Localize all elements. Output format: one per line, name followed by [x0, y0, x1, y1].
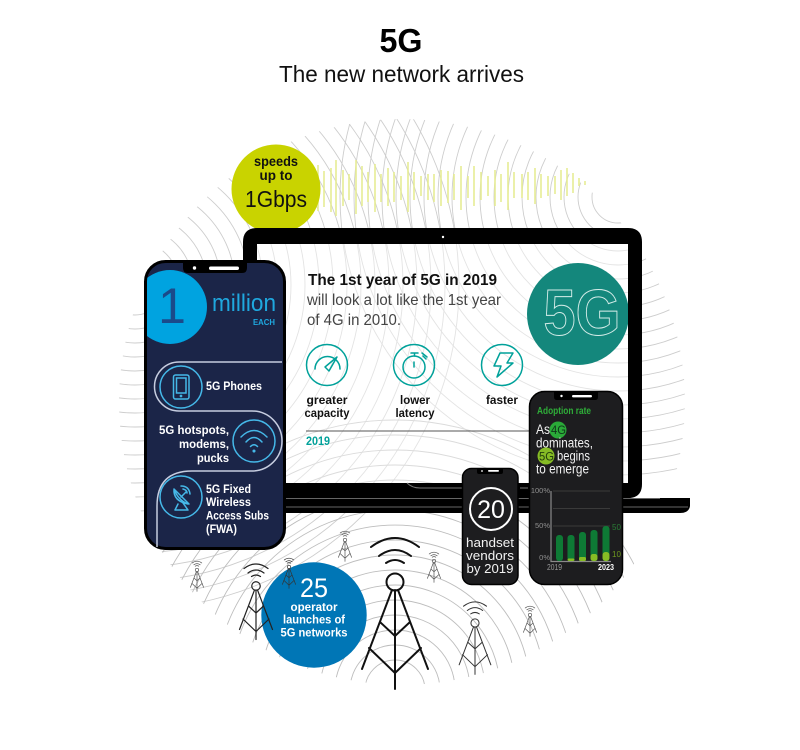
tower: small behind — [338, 531, 352, 561]
icon: stopwatch — [394, 344, 434, 386]
big 1 circle — [147, 270, 207, 344]
adoption text: 4G — [551, 423, 566, 437]
feature labels: greater — [306, 395, 348, 407]
operator launches bubble: 5G networks — [280, 628, 348, 640]
screen heading: The 1st year of 5G in 2019 — [308, 272, 497, 289]
speed bubble: speeds — [254, 154, 298, 169]
tower: right — [459, 602, 491, 674]
vendors text: handset — [466, 535, 514, 550]
panel: middle phone — [462, 468, 518, 584]
laptop screen lightening — [257, 244, 628, 483]
feature labels — [304, 395, 519, 420]
adoption heading: Adoption rate — [537, 405, 591, 417]
vendors text: vendors — [466, 548, 515, 563]
adoption bar chart: 50% — [535, 521, 550, 530]
feature labels: faster — [486, 395, 519, 407]
label: fixed wireless — [206, 484, 269, 536]
label: hotspots — [159, 425, 229, 465]
icon: wifi — [233, 420, 275, 462]
adoption text: to emerge — [536, 462, 589, 476]
speed bubble — [232, 144, 320, 234]
label: 5G Phones: 5G Phones — [206, 381, 262, 393]
notch — [477, 469, 503, 474]
each: EACH — [253, 317, 275, 327]
speaker — [560, 395, 592, 397]
tower: small far left — [190, 561, 204, 591]
screen body text: will look a lot like the 1st year — [306, 292, 502, 309]
number 1: 1 — [158, 278, 186, 334]
laptop base — [285, 498, 690, 513]
vendors text: by 2019 — [466, 561, 514, 576]
label: fixed wireless: Wireless — [206, 497, 251, 509]
soundwave speed bars — [318, 160, 585, 216]
label: fixed wireless: Access Subs — [206, 510, 269, 522]
icon: lightning — [482, 344, 522, 386]
notch — [554, 392, 598, 400]
speed bubble: 1Gbps — [245, 186, 307, 212]
tower: main — [362, 538, 428, 689]
adoption text — [536, 422, 593, 476]
laptop hinge notch — [407, 483, 528, 488]
5G badge: 5G — [544, 276, 620, 349]
vendors text — [466, 535, 515, 576]
adoption text: dominates, — [536, 436, 593, 450]
adoption text: begins — [557, 448, 590, 464]
background signal wave arcs — [119, 119, 685, 684]
label: fixed wireless: 5G Fixed — [206, 484, 251, 496]
timeline year: 2019 — [306, 436, 330, 448]
5G marker — [538, 448, 554, 464]
panel: laptop screen content — [304, 263, 629, 448]
icon: gauge — [306, 344, 348, 386]
adoption bar chart: 0% — [539, 553, 550, 562]
tower: small far right — [523, 606, 537, 636]
label: hotspots: modems, — [179, 439, 229, 451]
operator launches bubble: 25 — [300, 573, 328, 603]
adoption bar chart: 50 — [612, 523, 621, 532]
phone notch — [183, 262, 247, 273]
number badge: 20 — [477, 496, 505, 524]
feature labels: capacity — [304, 408, 350, 420]
laptop frame — [243, 228, 642, 498]
tower: small on bubble — [282, 558, 296, 588]
screen body text — [306, 292, 502, 329]
adoption bar chart: 2019 — [547, 563, 562, 572]
operator launches bubble: launches of — [283, 614, 345, 626]
label: hotspots: 5G hotspots, — [159, 425, 229, 437]
million: million — [212, 290, 276, 317]
pill outline — [154, 362, 282, 547]
adoption text: As — [536, 422, 550, 437]
phone speaker — [193, 266, 239, 270]
laptop camera — [442, 236, 444, 238]
timeline rule — [306, 430, 532, 432]
operator launches bubble: operator — [290, 602, 338, 614]
feature labels: latency — [396, 408, 435, 420]
tower: small near vendors — [427, 552, 441, 582]
adoption bar chart: 100% — [531, 486, 550, 495]
panel: right phone — [530, 392, 622, 584]
speaker — [481, 470, 499, 472]
title: 5G — [380, 22, 422, 59]
label: fixed wireless: (FWA) — [206, 524, 237, 536]
adoption bar chart: 10 — [612, 550, 621, 559]
operator launches bubble — [261, 562, 367, 668]
speed bubble: up to — [260, 168, 292, 183]
label: hotspots: pucks — [197, 453, 229, 465]
icon: phone — [160, 366, 202, 408]
icon: satellite dish — [160, 476, 202, 518]
panel: left phone — [133, 262, 284, 548]
5G badge — [527, 263, 629, 365]
subtitle: The new network arrives — [279, 61, 524, 87]
4G marker — [550, 422, 566, 438]
adoption text: 5G — [539, 450, 554, 464]
adoption bar chart: 2023 — [598, 563, 614, 572]
feature labels: lower — [400, 395, 431, 407]
tower: left — [240, 564, 272, 640]
adoption bar chart — [531, 486, 621, 572]
screen body text: of 4G in 2010. — [307, 312, 401, 329]
